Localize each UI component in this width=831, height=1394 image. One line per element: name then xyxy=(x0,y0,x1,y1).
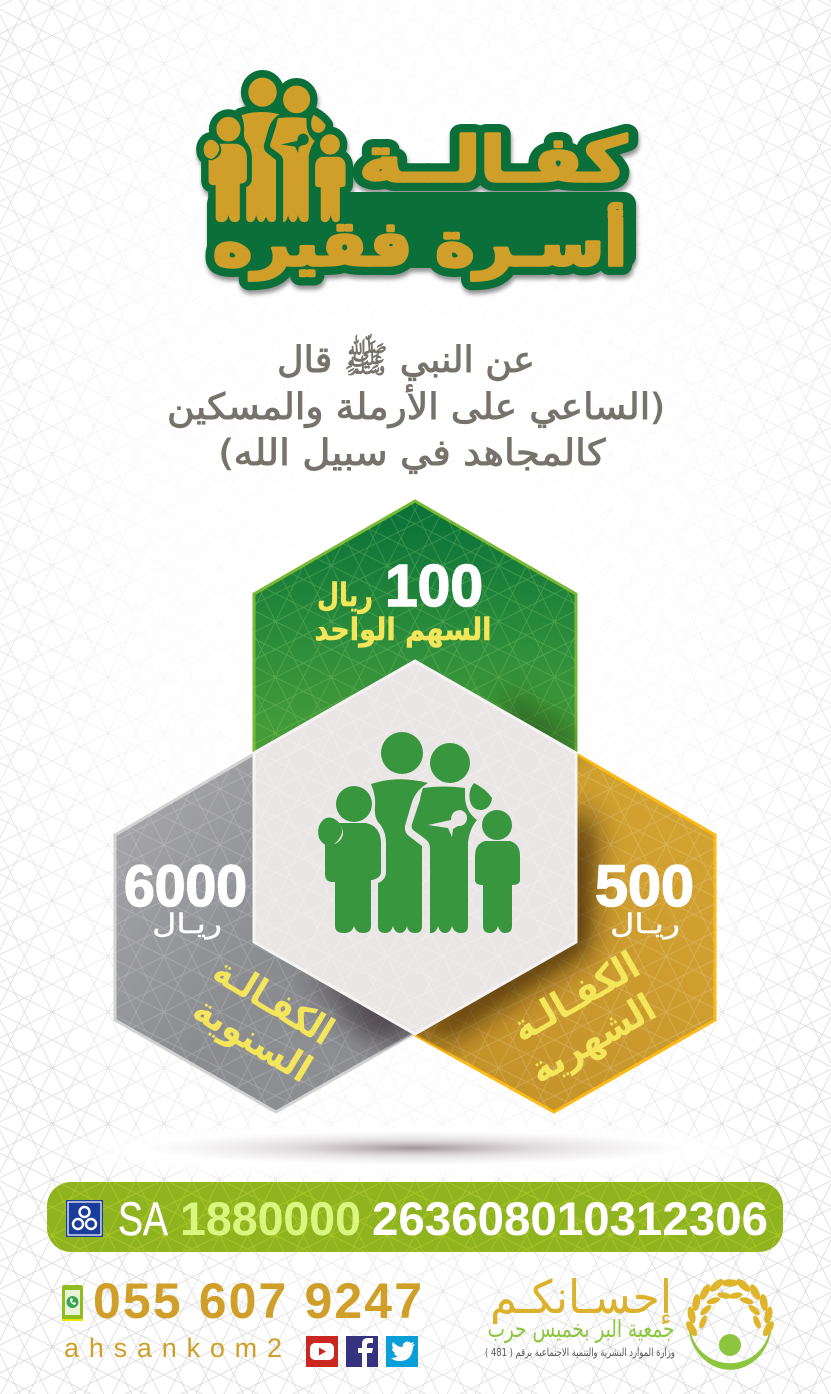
icon: phone xyxy=(62,1285,83,1321)
IBAN bar xyxy=(47,1182,783,1252)
hexagon: grey left xyxy=(115,741,415,1112)
hadith text xyxy=(167,334,665,474)
title logo: family and title text xyxy=(203,77,636,280)
green title outline layer: أسـرة فقيره xyxy=(213,203,627,280)
hadith line one: عن النبي ﷺ قال xyxy=(277,334,535,381)
IBAN highlighted digits: 1880000 xyxy=(180,1192,361,1245)
organisation logo xyxy=(485,1270,776,1369)
yearly sponsorship label line two: السنوية xyxy=(186,987,320,1091)
central hexagon shadow xyxy=(300,690,595,1040)
monthly sponsorship label line one: الكفـالـة xyxy=(504,943,647,1051)
title line one: كفـالــة xyxy=(360,123,628,196)
green title outline layer: كفـالــة xyxy=(360,123,628,196)
organisation name: إحسـانكـم xyxy=(490,1270,672,1324)
green title outline layer xyxy=(203,77,636,280)
riyal label: ريال xyxy=(317,576,373,614)
floor shadow xyxy=(140,1131,690,1165)
hadith line two: (الساعي على الأرملة والمسكين xyxy=(167,384,665,428)
riyal label: ريـال xyxy=(152,909,222,940)
single share label: السهم الواحد xyxy=(314,612,492,648)
social handle: ahsankom2 xyxy=(64,1333,282,1363)
number 100: 100 xyxy=(385,553,483,619)
icon: youtube xyxy=(306,1336,338,1367)
ministry registration: وزارة الموارد البشرية والتنمية الاجتماعية برقم ( 481 ) xyxy=(485,1346,675,1359)
label: 500 riyal monthly xyxy=(504,854,694,1092)
number 500: 500 xyxy=(595,854,694,919)
icon: twitter xyxy=(386,1336,418,1367)
phone number: 055 607 9247 xyxy=(93,1273,422,1329)
icon: wheat ring emblem xyxy=(684,1277,776,1369)
central hexagon xyxy=(254,661,576,1034)
association name: جمعية البر بخميس حرب xyxy=(488,1315,674,1343)
monthly sponsorship label line two: الشهرية xyxy=(522,985,663,1092)
IBAN prefix: SA xyxy=(118,1192,169,1245)
icon: facebook xyxy=(346,1336,378,1367)
hexagon: gold right xyxy=(415,741,715,1112)
family emblem in logo xyxy=(203,77,346,223)
label: 6000 riyal yearly xyxy=(124,854,342,1091)
icon: bank logo xyxy=(66,1200,103,1237)
IBAN digits: 263608010312306 xyxy=(372,1192,768,1245)
icon: family in centre xyxy=(318,732,520,933)
label: 100 riyal share xyxy=(314,553,492,648)
hadith line three: كالمجاهد في سبيل الله) xyxy=(218,433,606,474)
yearly sponsorship label line one: الكفـالـة xyxy=(206,948,342,1054)
hexagon: green top xyxy=(254,501,576,780)
title line two: أسـرة فقيره xyxy=(213,203,627,280)
number 6000: 6000 xyxy=(124,854,247,919)
hexagon diagram xyxy=(115,501,715,1112)
riyal label: ريـال xyxy=(610,909,680,940)
